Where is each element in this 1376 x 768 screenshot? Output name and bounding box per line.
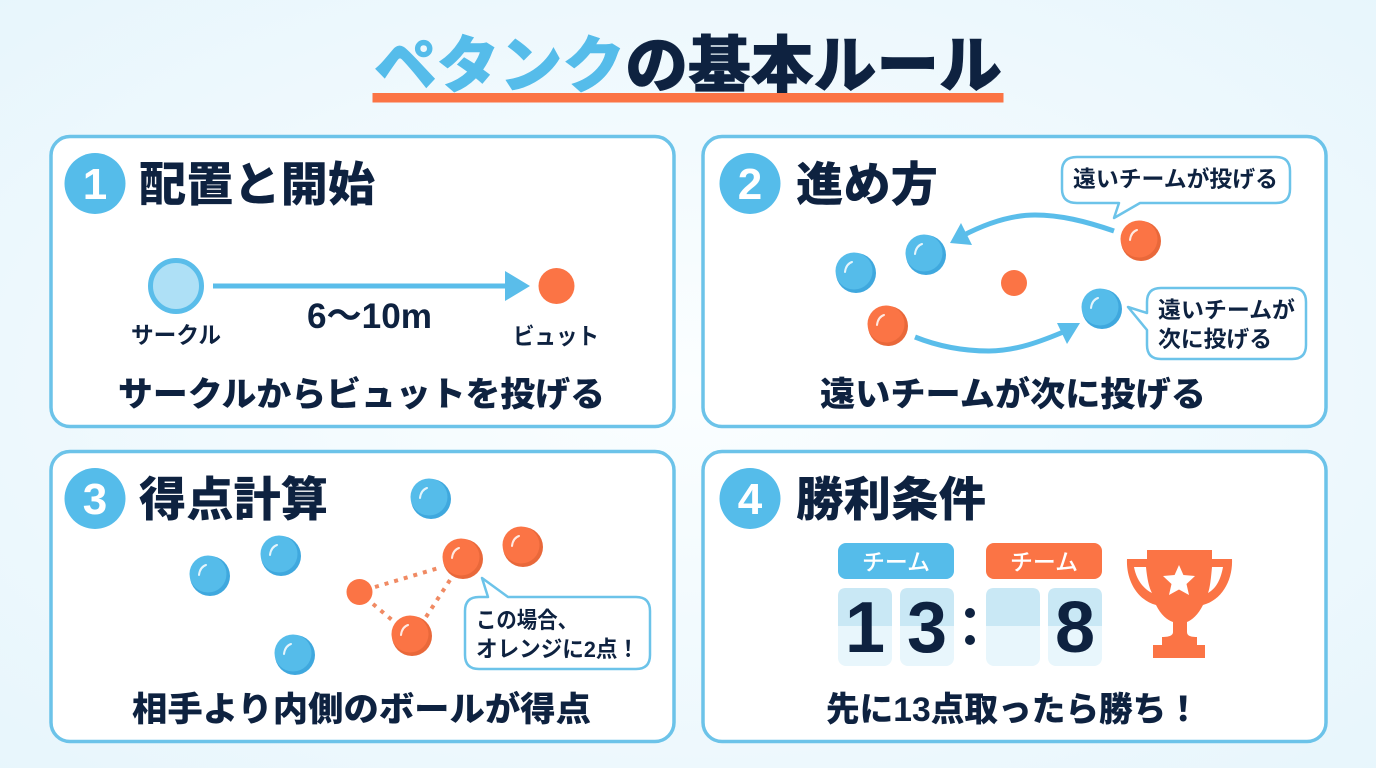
panel: 3 scoring xyxy=(51,452,674,742)
caption 4: 先に13点取ったら勝ち！ xyxy=(826,691,1200,729)
callout: far team throws xyxy=(1062,157,1290,218)
score tile: blank xyxy=(986,588,1040,666)
team label: blue: チーム xyxy=(862,549,930,575)
team label: blue xyxy=(838,543,954,579)
arrow: orange ball to blue ball xyxy=(950,215,1114,245)
score tile: 1: 1 xyxy=(845,588,885,668)
dotted distance lines xyxy=(373,567,450,620)
ball: orange scoring lower xyxy=(392,616,432,656)
distance label: 6〜10m xyxy=(307,297,432,336)
panel: 2 how to proceed xyxy=(703,136,1326,426)
heading: 配置と開始: 配置と開始 xyxy=(139,158,375,211)
callout: far team throws next: 次に投げる xyxy=(1158,327,1272,352)
number badge 2: 2 xyxy=(738,160,762,209)
team label: orange: チーム xyxy=(1010,549,1078,575)
heading: 進め方: 進め方 xyxy=(796,158,938,211)
score tile: 3: 3 xyxy=(907,588,947,668)
ball: orange bottom left xyxy=(868,306,908,346)
ball: blue bottom xyxy=(274,634,315,675)
arrow: orange ball to far blue ball xyxy=(915,323,1080,351)
title: ペタンクの基本ルール xyxy=(374,32,1002,101)
label: cochonnet: ビュット xyxy=(513,323,599,349)
label: circle: サークル xyxy=(131,322,221,348)
number badge 1 xyxy=(64,153,126,214)
heading: 得点計算: 得点計算 xyxy=(139,473,328,526)
callout: far team throws next: 遠いチームが xyxy=(1158,297,1296,323)
panel: 4 win condition xyxy=(703,452,1326,742)
ball: orange top right xyxy=(1120,220,1161,261)
number badge 2 xyxy=(720,153,780,214)
callout: orange scores two: オレンジに2点！ xyxy=(476,637,639,662)
caption 3: 相手より内側のボールが得点 xyxy=(132,690,591,729)
ball: blue right xyxy=(1082,288,1122,329)
caption 2: 遠いチームが次に投げる xyxy=(820,375,1206,414)
ball: orange scoring upper xyxy=(442,538,483,579)
score colon xyxy=(965,608,975,645)
callout: orange scores two xyxy=(465,578,650,669)
score tile: 8: 8 xyxy=(1055,588,1095,668)
number badge 3: 3 xyxy=(83,475,107,524)
callout: far team throws next xyxy=(1128,288,1306,359)
number badge 3 xyxy=(64,468,126,529)
cochonnet xyxy=(1001,270,1027,296)
ball: orange far right xyxy=(502,526,543,567)
ball: blue middle xyxy=(260,536,301,576)
icon: circle xyxy=(150,260,202,312)
number badge 4 xyxy=(720,468,780,529)
ball: blue left xyxy=(836,252,876,293)
ball: blue top xyxy=(410,478,451,519)
number badge 1: 1 xyxy=(83,160,107,209)
heading: 勝利条件: 勝利条件 xyxy=(796,473,986,526)
cochonnet xyxy=(346,579,372,605)
number badge 4: 4 xyxy=(738,475,763,524)
ball: blue left xyxy=(190,556,230,596)
callout: far team throws: 遠いチームが投げる xyxy=(1073,166,1278,192)
icon: cochonnet xyxy=(538,268,574,304)
icon: trophy xyxy=(1127,550,1232,658)
caption 1: サークルからビュットを投げる xyxy=(118,375,605,414)
ball: blue upper xyxy=(906,234,946,275)
team label: orange xyxy=(986,543,1102,579)
panel: 1 placement and start xyxy=(51,136,674,426)
arrow: circle to cochonnet xyxy=(213,271,530,301)
callout: orange scores two: この場合、 xyxy=(476,608,578,633)
